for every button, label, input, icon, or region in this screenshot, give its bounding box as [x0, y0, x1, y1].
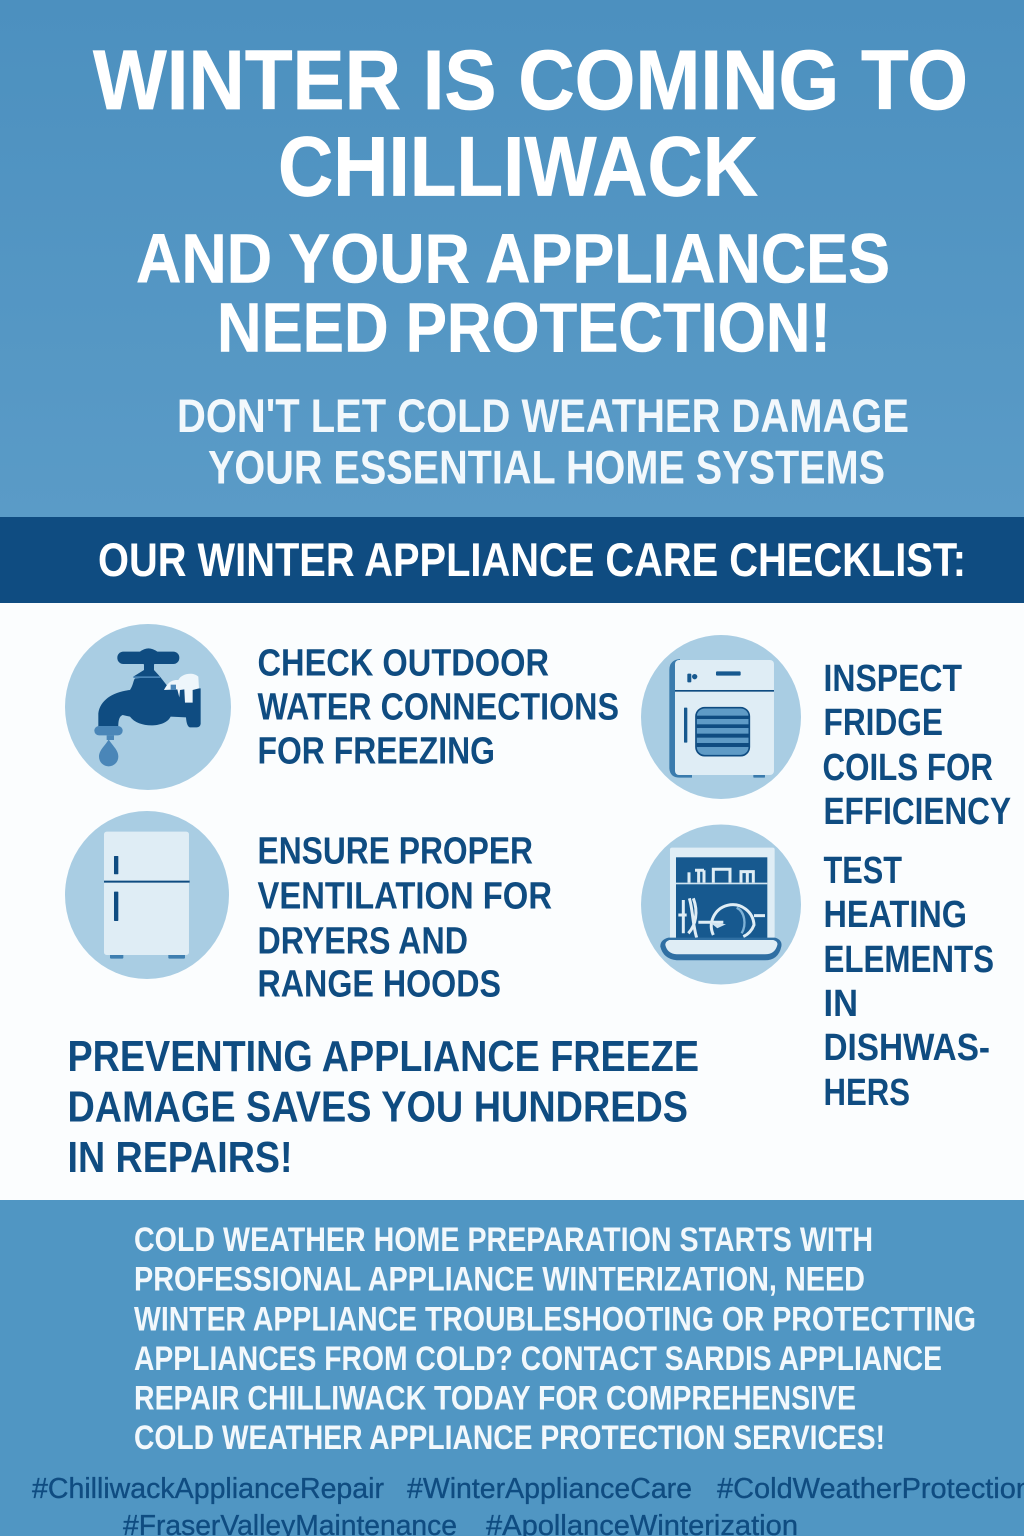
text: ensure proper ventilation: [258, 830, 552, 1006]
panel: checklist: [0, 603, 1024, 1200]
title: CHILLIWACK: [278, 120, 758, 214]
tagline: YOUR ESSENTIAL HOME SYSTEMS: [208, 440, 885, 494]
callout: freeze damage savings: IN REPAIRS!: [68, 1133, 292, 1182]
text: check outdoor water connections: [258, 642, 619, 772]
text: ensure proper ventilation: DRYERS AND: [258, 920, 468, 962]
text: test heating elements: HEATING: [824, 894, 967, 936]
text: test heating elements: TEST: [824, 850, 902, 892]
call to action text: REPAIR CHILLIWACK TODAY FOR COMPREHENSIVE: [134, 1380, 856, 1418]
text: test heating elements: IN: [824, 983, 858, 1025]
text: inspect fridge coils: COILS FOR: [822, 747, 993, 789]
text: inspect fridge coils: [822, 658, 1011, 833]
subtitle: NEED PROTECTION!: [217, 288, 831, 366]
hashtags: #ColdWeatherProtection: [717, 1473, 1024, 1505]
callout: freeze damage savings: DAMAGE SAVES YOU HUNDREDS: [68, 1082, 688, 1132]
callout: freeze damage savings: [68, 1032, 699, 1182]
text: check outdoor water connections: WATER CONNECTIONS: [258, 686, 619, 728]
text: ensure proper ventilation: RANGE HOODS: [258, 964, 501, 1006]
subtitle: AND YOUR APPLIANCES: [136, 220, 890, 298]
hashtags: #WinterApplianceCare: [407, 1473, 692, 1505]
text: test heating elements: DISHWAS-: [824, 1027, 990, 1069]
panel: checklist heading band: [0, 517, 1024, 603]
call to action text: PROFESSIONAL APPLIANCE WINTERIZATION, NEED: [134, 1260, 865, 1298]
text: inspect fridge coils: FRIDGE: [824, 702, 943, 744]
tagline: [177, 389, 909, 494]
icon: frozen faucet: [65, 624, 231, 790]
tagline: DON'T LET COLD WEATHER DAMAGE: [177, 389, 909, 442]
callout: freeze damage savings: PREVENTING APPLIANCE FREEZE: [68, 1032, 699, 1081]
text: ensure proper ventilation: ENSURE PROPER: [258, 830, 533, 872]
icon: dishwasher: [641, 824, 801, 984]
text: test heating elements: [824, 850, 994, 1114]
call to action text: [134, 1221, 976, 1457]
icon: fridge: [65, 811, 229, 979]
panel: header: [0, 0, 1024, 517]
call to action text: COLD WEATHER APPLIANCE PROTECTION SERVICES!: [134, 1419, 885, 1457]
subtitle: [136, 220, 890, 366]
text: ensure proper ventilation: VENTILATION FOR: [258, 876, 552, 918]
title: [93, 33, 968, 214]
hashtags: [32, 1473, 1024, 1536]
text: check outdoor water connections: FOR FREEZING: [258, 730, 495, 772]
title: WINTER IS COMING TO: [93, 33, 968, 127]
hashtags: #ChilliwackApplianceRepair: [32, 1473, 384, 1505]
text: test heating elements: HERS: [824, 1072, 910, 1114]
panel: footer: [0, 1200, 1024, 1536]
text: check outdoor water connections: CHECK OUTDOOR: [258, 642, 549, 684]
call to action text: COLD WEATHER HOME PREPARATION STARTS WITH: [134, 1221, 873, 1259]
icon: dryer: [641, 635, 801, 799]
text: inspect fridge coils: INSPECT: [824, 658, 962, 700]
